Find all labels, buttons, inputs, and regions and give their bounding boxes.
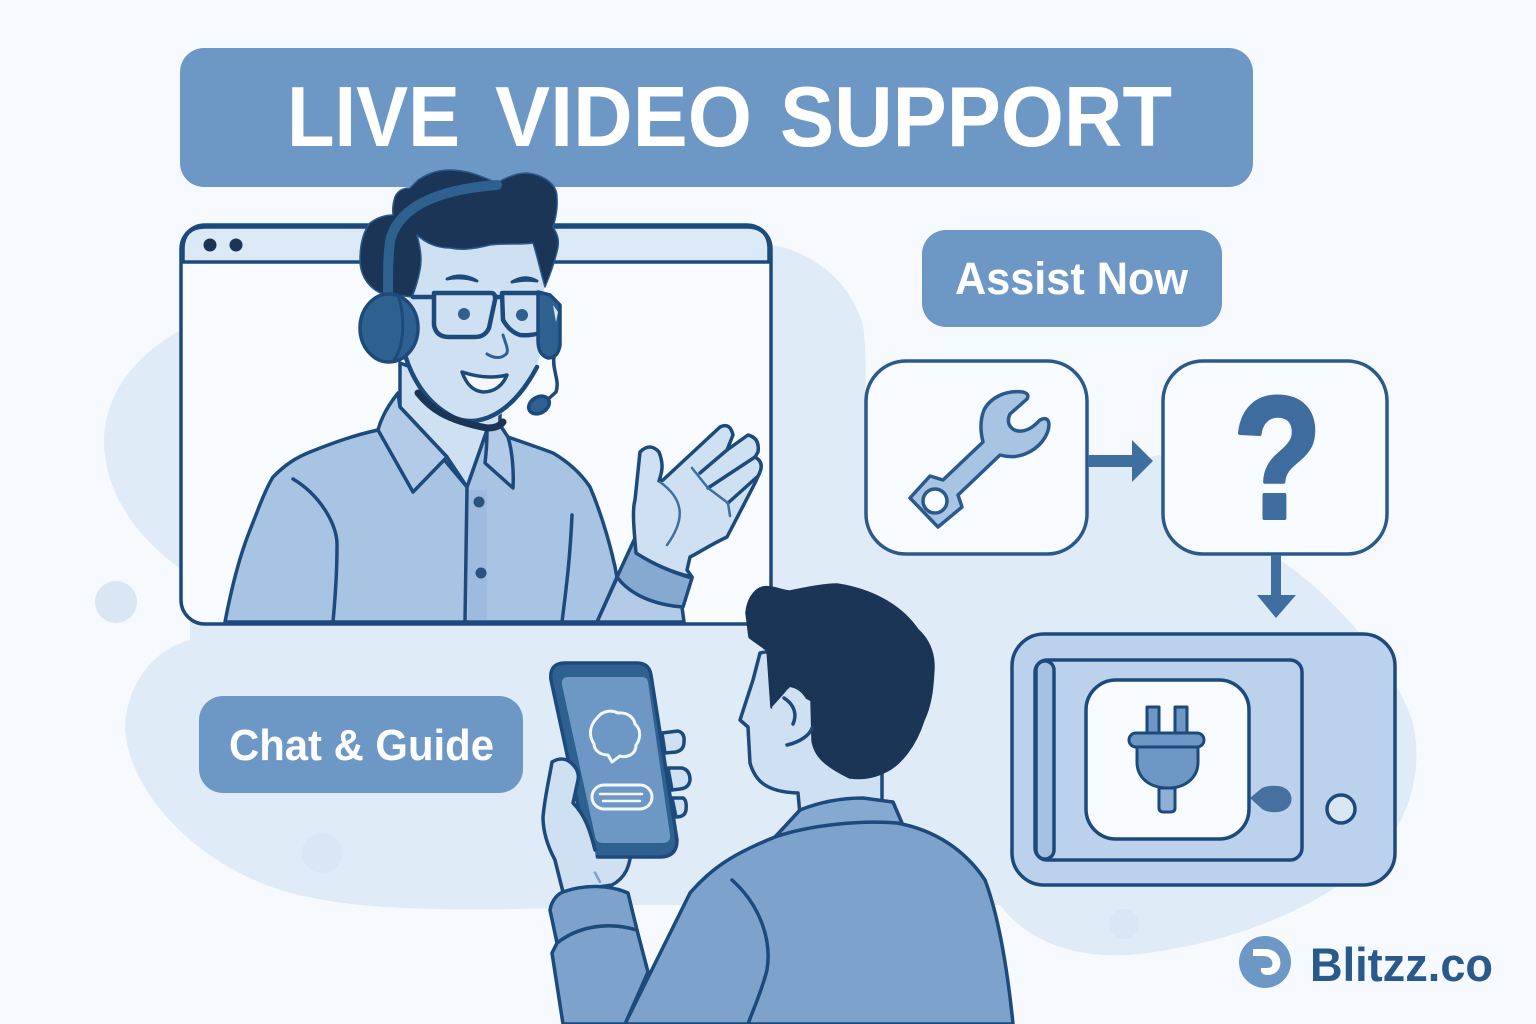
eyebrows <box>447 276 537 282</box>
chat bubble icon <box>590 711 640 762</box>
plug card <box>1086 680 1249 839</box>
device panel <box>1012 634 1395 885</box>
microphone <box>545 357 557 402</box>
fingers <box>662 731 684 753</box>
arrow: wrench to question <box>1088 440 1153 482</box>
nose <box>487 335 507 358</box>
video call window <box>181 225 771 624</box>
ear cup <box>360 294 418 362</box>
customer cuff <box>550 886 637 943</box>
assist now button: Assist Now <box>955 253 1189 304</box>
customer sleeve <box>552 926 648 1024</box>
customer neck and face <box>740 640 882 815</box>
icon: plug <box>1129 707 1204 812</box>
logo mark <box>1239 936 1291 988</box>
agent forearm <box>597 540 692 622</box>
agent cuff <box>617 538 692 607</box>
agent hair <box>360 170 558 297</box>
agent neck <box>400 363 500 487</box>
assist now button <box>922 230 1222 327</box>
customer body <box>625 822 1013 1024</box>
agent collar right <box>485 425 513 488</box>
phone pill button <box>592 785 652 809</box>
decorative dots <box>95 581 1139 939</box>
title banner: SUPPORT <box>780 70 1172 165</box>
support agent <box>225 170 761 622</box>
thumb outline <box>543 759 595 892</box>
icon: question mark: ? <box>1233 360 1322 555</box>
logo wordmark: Blitzz.co <box>1310 938 1493 991</box>
customer collar <box>775 798 902 837</box>
chat and guide button <box>199 696 523 793</box>
title banner: LIVE <box>287 70 460 165</box>
palm crease <box>590 862 600 882</box>
headset band <box>388 185 497 295</box>
customer with phone <box>543 585 1013 1024</box>
customer hair <box>747 585 933 777</box>
shirt details <box>293 479 572 622</box>
logo <box>1239 936 1493 991</box>
title banner: VIDEO <box>495 70 752 165</box>
agent shirt <box>225 407 617 622</box>
question card <box>1163 360 1387 555</box>
placket shade <box>468 490 487 620</box>
title banner <box>180 48 1253 187</box>
right ear cup <box>538 292 560 358</box>
glasses <box>413 293 540 337</box>
palm <box>555 845 632 892</box>
customer ear <box>772 687 810 745</box>
arrow: question to device <box>1257 555 1296 618</box>
wrench card <box>866 361 1087 554</box>
eyes <box>458 308 470 320</box>
chat and guide button: Chat & Guide <box>229 721 494 770</box>
background blobs <box>104 245 1416 955</box>
mouth <box>462 372 507 392</box>
phone <box>551 663 677 857</box>
agent hand <box>633 426 761 577</box>
indicator knob <box>1250 786 1292 812</box>
icon: wrench <box>910 392 1049 527</box>
thumb fill <box>543 759 597 892</box>
agent collar left <box>378 393 447 492</box>
agent face <box>406 235 545 425</box>
